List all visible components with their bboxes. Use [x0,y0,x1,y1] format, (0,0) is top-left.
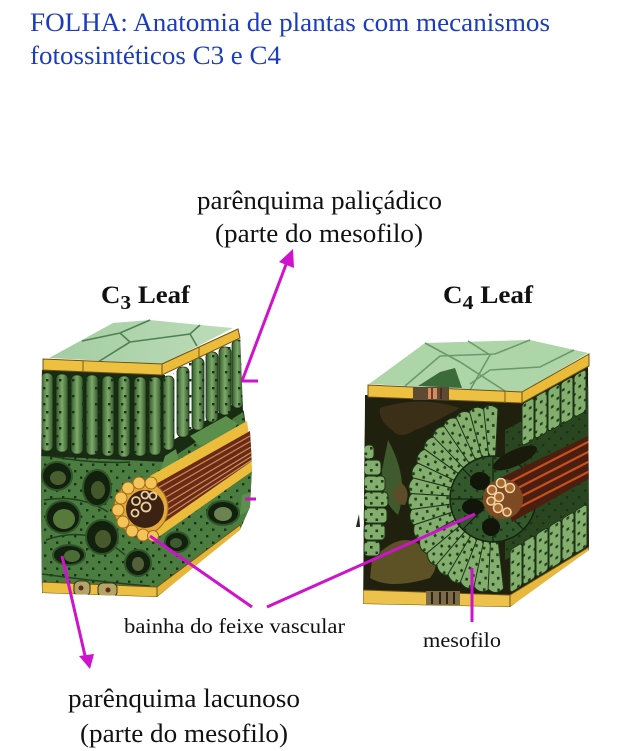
palisade cells, front face [41,370,243,462]
top epidermis surface [49,320,233,364]
lower epidermis [42,525,243,597]
mesophyll wreath around bundle [408,405,504,593]
palisade cells, side face [177,338,243,437]
leader line: mesofilo [470,568,474,622]
left partial mesophyll wreath [364,445,388,556]
label: parênquima lacunoso: parênquima lacunoso [68,684,300,713]
upper epidermis [368,354,589,403]
title: FOLHA: Anatomia de plantas com mecanismos [30,7,550,37]
label: parênquima lacunoso: (parte do mesofilo) [80,719,288,748]
label: parênquima paliçádico: (parte do mesofilo) [215,219,423,248]
heading: C4 Leaf: Leaf [473,282,534,309]
illustration: C3 leaf block [41,320,254,597]
heading: C3 Leaf: Leaf [131,282,191,309]
side-face mesophyll cells, upper row [522,369,586,446]
lower epidermis [363,547,589,607]
title: fotossintéticos C3 e C4 [30,40,281,70]
spongy mesophyll base [41,405,252,590]
label: parênquima paliçádico: parênquima paliçádico [197,186,442,215]
stray mark [356,514,360,527]
label: parênquima paliçádico [197,186,442,248]
arrow: to parênquima lacunoso [62,556,94,669]
air spaces in spongy mesophyll [42,462,239,576]
side-face mesophyll cells, lower row [510,504,587,593]
marker line: right tick on C3 block [245,498,256,500]
heading: C3 Leaf: 3 [120,292,131,314]
title [30,7,550,70]
bundle sheath ring [450,441,540,542]
label: bainha do feixe vascular: bainha do feixe vascular [124,614,345,638]
upper epidermis [43,329,240,375]
heading: C3 Leaf: C [101,282,119,309]
label: mesofilo: mesofilo [423,628,501,652]
heading: C4 Leaf: 4 [463,292,473,314]
leader lines: bainha do feixe vascular [150,514,475,607]
top epidermis surface [369,340,588,392]
vascular bundle [112,421,254,542]
arrow: to parênquima paliçádico [242,249,294,381]
dark air spaces and olive lobes [363,360,590,600]
green mesophyll lobes beside vascular bundle [160,416,252,515]
heading: C4 Leaf: C [443,282,461,309]
illustration: C4 leaf block [363,340,590,607]
label: parênquima lacunoso [68,684,300,748]
vascular bundle [483,435,590,522]
